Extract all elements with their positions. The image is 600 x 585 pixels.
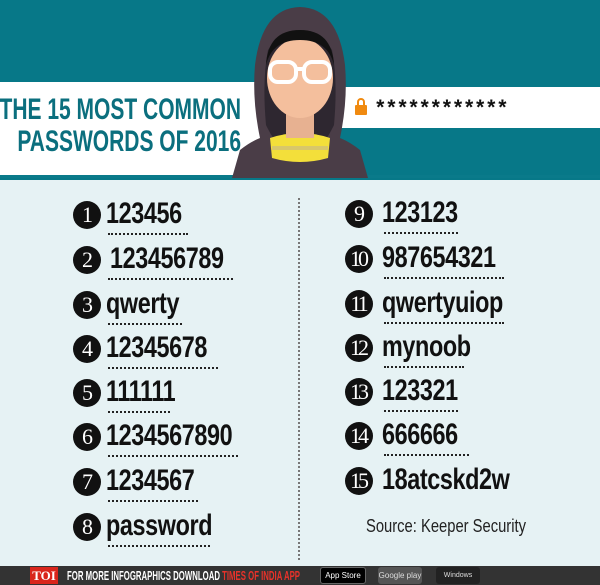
item 9: 9	[354, 201, 362, 226]
item 7: 1234567	[106, 464, 194, 497]
item 6: 1234567890	[106, 419, 232, 452]
item 4	[73, 331, 218, 369]
app store badges: App Store	[325, 571, 361, 580]
item 11: 11	[350, 291, 366, 316]
item 15: 15	[350, 468, 366, 493]
item 14: 666666	[382, 418, 458, 451]
item 5: 111111	[106, 375, 175, 408]
item 4: 4	[82, 336, 90, 361]
left column list	[73, 197, 238, 547]
item 8: 8	[82, 514, 90, 539]
item 2: 123456789	[110, 242, 224, 275]
item 9	[345, 196, 458, 234]
item 12	[345, 330, 471, 368]
footer bar	[0, 566, 600, 585]
title: THE 15 MOST COMMON	[0, 93, 241, 126]
item 2	[73, 242, 233, 280]
item 13: 13	[350, 379, 366, 404]
item 13	[345, 374, 458, 412]
item 11: qwertyuiop	[382, 286, 503, 319]
item 12: 12	[350, 335, 366, 360]
item 15: 18atcskd2w	[382, 463, 509, 496]
item 14: 14	[350, 423, 366, 448]
item 3: qwerty	[106, 287, 179, 320]
source: Source: Keeper Security	[366, 516, 526, 536]
right column list	[345, 196, 526, 536]
item 8: password	[106, 509, 212, 542]
item 2: 2	[82, 247, 90, 272]
item 10: 987654321	[382, 241, 496, 274]
footer bar: Google play	[379, 571, 421, 580]
footer bar: Windows	[444, 572, 472, 579]
teal bottom line	[0, 175, 600, 178]
item 5	[73, 375, 175, 413]
item 7	[73, 464, 198, 502]
TOI logo: TOI	[32, 568, 56, 583]
item 12: mynoob	[382, 330, 471, 363]
divider line	[298, 198, 300, 560]
item 3: 3	[82, 292, 90, 317]
item 3	[73, 287, 182, 325]
item 7: 7	[82, 469, 90, 494]
password bar	[340, 87, 600, 128]
item 4: 12345678	[106, 331, 207, 364]
item 13: 123321	[382, 374, 458, 407]
item 1	[73, 197, 188, 235]
hacker illustration	[232, 7, 368, 178]
item 10: 10	[350, 246, 366, 271]
item 5: 5	[82, 380, 90, 405]
item 1: 123456	[106, 197, 182, 230]
title white band	[0, 82, 290, 175]
item 10	[345, 241, 504, 279]
header teal band	[0, 0, 600, 180]
item 11	[345, 286, 504, 324]
footer text: FOR MORE INFOGRAPHICS DOWNLOAD TIMES OF INDIA APP	[67, 568, 300, 583]
item 6	[73, 419, 238, 457]
item 14	[345, 418, 469, 456]
item 8	[73, 509, 212, 547]
asterisks: ************	[374, 99, 507, 122]
app store badges	[320, 567, 366, 584]
title	[0, 93, 241, 158]
icon: lock	[355, 98, 367, 115]
item 6: 6	[82, 424, 90, 449]
title: PASSWORDS OF 2016	[17, 125, 241, 158]
item 1: 1	[82, 202, 90, 227]
item 9: 123123	[382, 196, 458, 229]
